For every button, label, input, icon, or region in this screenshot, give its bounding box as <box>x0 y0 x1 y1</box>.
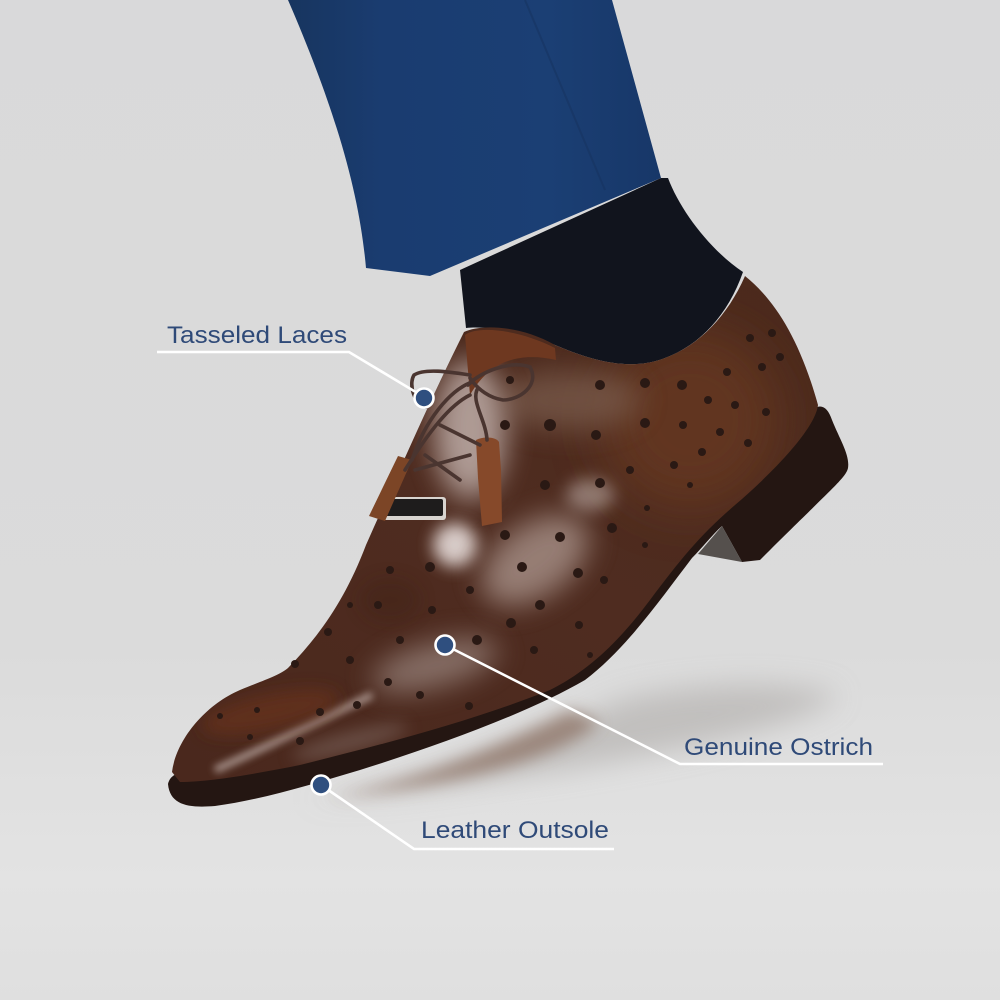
label: Leather Outsole <box>421 817 609 844</box>
callout: Genuine Ostrich <box>436 636 883 764</box>
tassel left <box>369 456 412 521</box>
ostrich quill bumps <box>217 329 784 745</box>
heel breast <box>698 526 742 562</box>
black sock <box>460 178 743 364</box>
tassel right <box>476 438 502 526</box>
leather sole and heel <box>168 406 848 807</box>
label: Genuine Ostrich <box>684 734 873 761</box>
shoe <box>168 276 848 807</box>
metal logo plate <box>383 497 446 520</box>
ostrich upper <box>172 276 818 782</box>
marker dot <box>436 636 454 654</box>
laces <box>405 365 533 480</box>
leather sheen <box>198 330 780 770</box>
callout: Leather Outsole <box>312 776 614 849</box>
label: Tasseled Laces <box>167 322 347 349</box>
marker dot <box>414 388 434 408</box>
callout: Tasseled Laces <box>157 322 434 408</box>
marker dot <box>312 776 330 794</box>
trouser leg <box>288 0 661 276</box>
ground shadow <box>300 684 840 800</box>
